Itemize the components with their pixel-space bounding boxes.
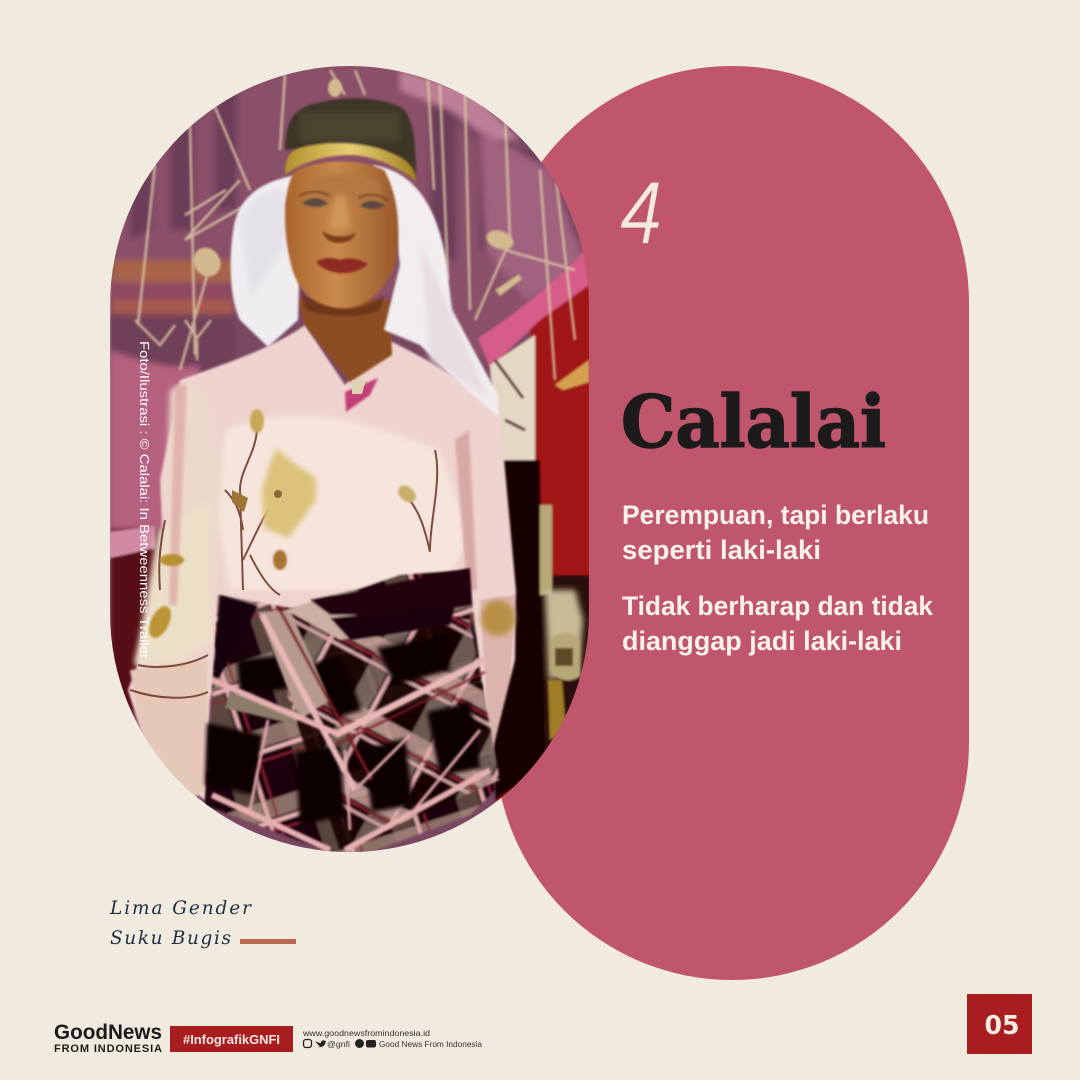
white veil: [231, 165, 498, 416]
photo background: hanging straw strands: [135, 70, 575, 380]
eyes: [302, 198, 385, 209]
text block: description: [622, 500, 934, 656]
black hat with gold band: [285, 98, 416, 181]
photo credit: Foto/Ilustrasi : © Calalai: In Betweenness Trailer: [137, 341, 152, 660]
photo: person in traditional Bugis dress: [110, 60, 590, 860]
jaw shadow: [300, 290, 384, 316]
text block: description: Perempuan, tapi berlaku: [622, 500, 929, 530]
series title: Lima Gender: [109, 898, 252, 919]
pink cloth lower left: [110, 350, 200, 545]
footer logo: [54, 1021, 162, 1055]
text block: description: seperti laki-laki: [622, 535, 821, 565]
woven band on the left: [110, 260, 235, 375]
embroidered flower and leaves: [145, 409, 515, 641]
footer logo: GoodNews: [54, 1021, 162, 1044]
footer contact info: @gnfi: [327, 1039, 350, 1049]
skirt dark checks: [205, 635, 480, 826]
footer contact info: [302, 1028, 482, 1049]
icon: twitter: [315, 1040, 326, 1047]
accent bar: [240, 939, 296, 944]
footer logo: FROM INDONESIA: [54, 1043, 162, 1055]
icon: instagram: [304, 1040, 312, 1048]
right red cloth: [529, 284, 589, 577]
footer contact info: www.goodnewsfromindonesia.id: [302, 1028, 430, 1038]
panel: maroon pill: [495, 66, 969, 980]
ornament on the right: [540, 505, 552, 595]
blouse: [128, 325, 516, 800]
blouse embroidery: [130, 430, 437, 698]
hashtag badge: [170, 1026, 293, 1052]
neck: [298, 300, 392, 382]
series title: [109, 898, 252, 949]
icon: facebook: [355, 1039, 364, 1048]
text block: description: Tidak berharap dan tidak: [622, 591, 934, 621]
page number badge: 05: [984, 1011, 1020, 1041]
plaid skirt: [205, 568, 500, 860]
nose: [322, 230, 356, 243]
collar accent: [345, 378, 378, 412]
hashtag badge: #InfografikGNFI: [183, 1033, 280, 1047]
icon: youtube: [366, 1040, 376, 1048]
face: [285, 161, 398, 316]
series title: Suku Bugis: [110, 928, 231, 949]
text block: description: dianggap jadi laki-laki: [622, 626, 902, 656]
photo background: straw knots: [188, 79, 522, 296]
photo background: mauve curtain: [110, 60, 590, 860]
heading: Calalai: [621, 379, 886, 464]
number 4: 4: [613, 169, 673, 262]
mouth: [316, 258, 368, 273]
footer contact info: Good News From Indonesia: [379, 1039, 482, 1049]
page number badge: [967, 994, 1032, 1054]
